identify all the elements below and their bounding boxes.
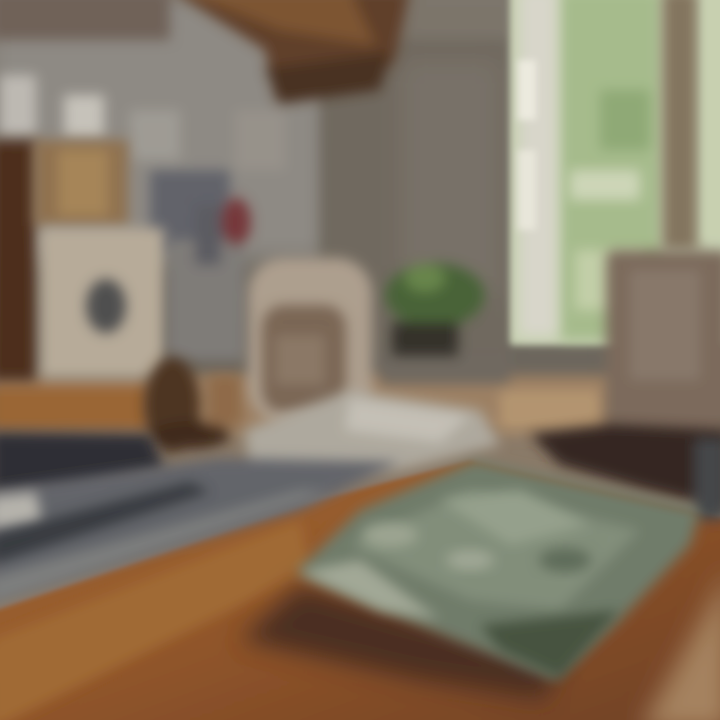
glass jar xyxy=(248,258,372,423)
wooden box xyxy=(0,140,36,380)
wooden shelf xyxy=(170,0,410,104)
green patterned cloth xyxy=(296,460,700,680)
window xyxy=(510,0,720,345)
dark object base xyxy=(530,424,720,520)
dark striped towel xyxy=(0,432,400,604)
table top xyxy=(0,460,720,720)
white cloth on counter xyxy=(245,390,500,480)
cardboard box xyxy=(34,140,128,226)
tiled backsplash highlights xyxy=(0,0,285,250)
back wall xyxy=(0,0,720,430)
counter ledge xyxy=(0,350,620,435)
white box with round emblem xyxy=(40,228,164,378)
small brown jar xyxy=(144,357,242,453)
right-side grey box xyxy=(606,250,720,440)
bottle xyxy=(168,198,251,360)
plant xyxy=(385,263,485,356)
shadow under green cloth xyxy=(240,585,560,700)
